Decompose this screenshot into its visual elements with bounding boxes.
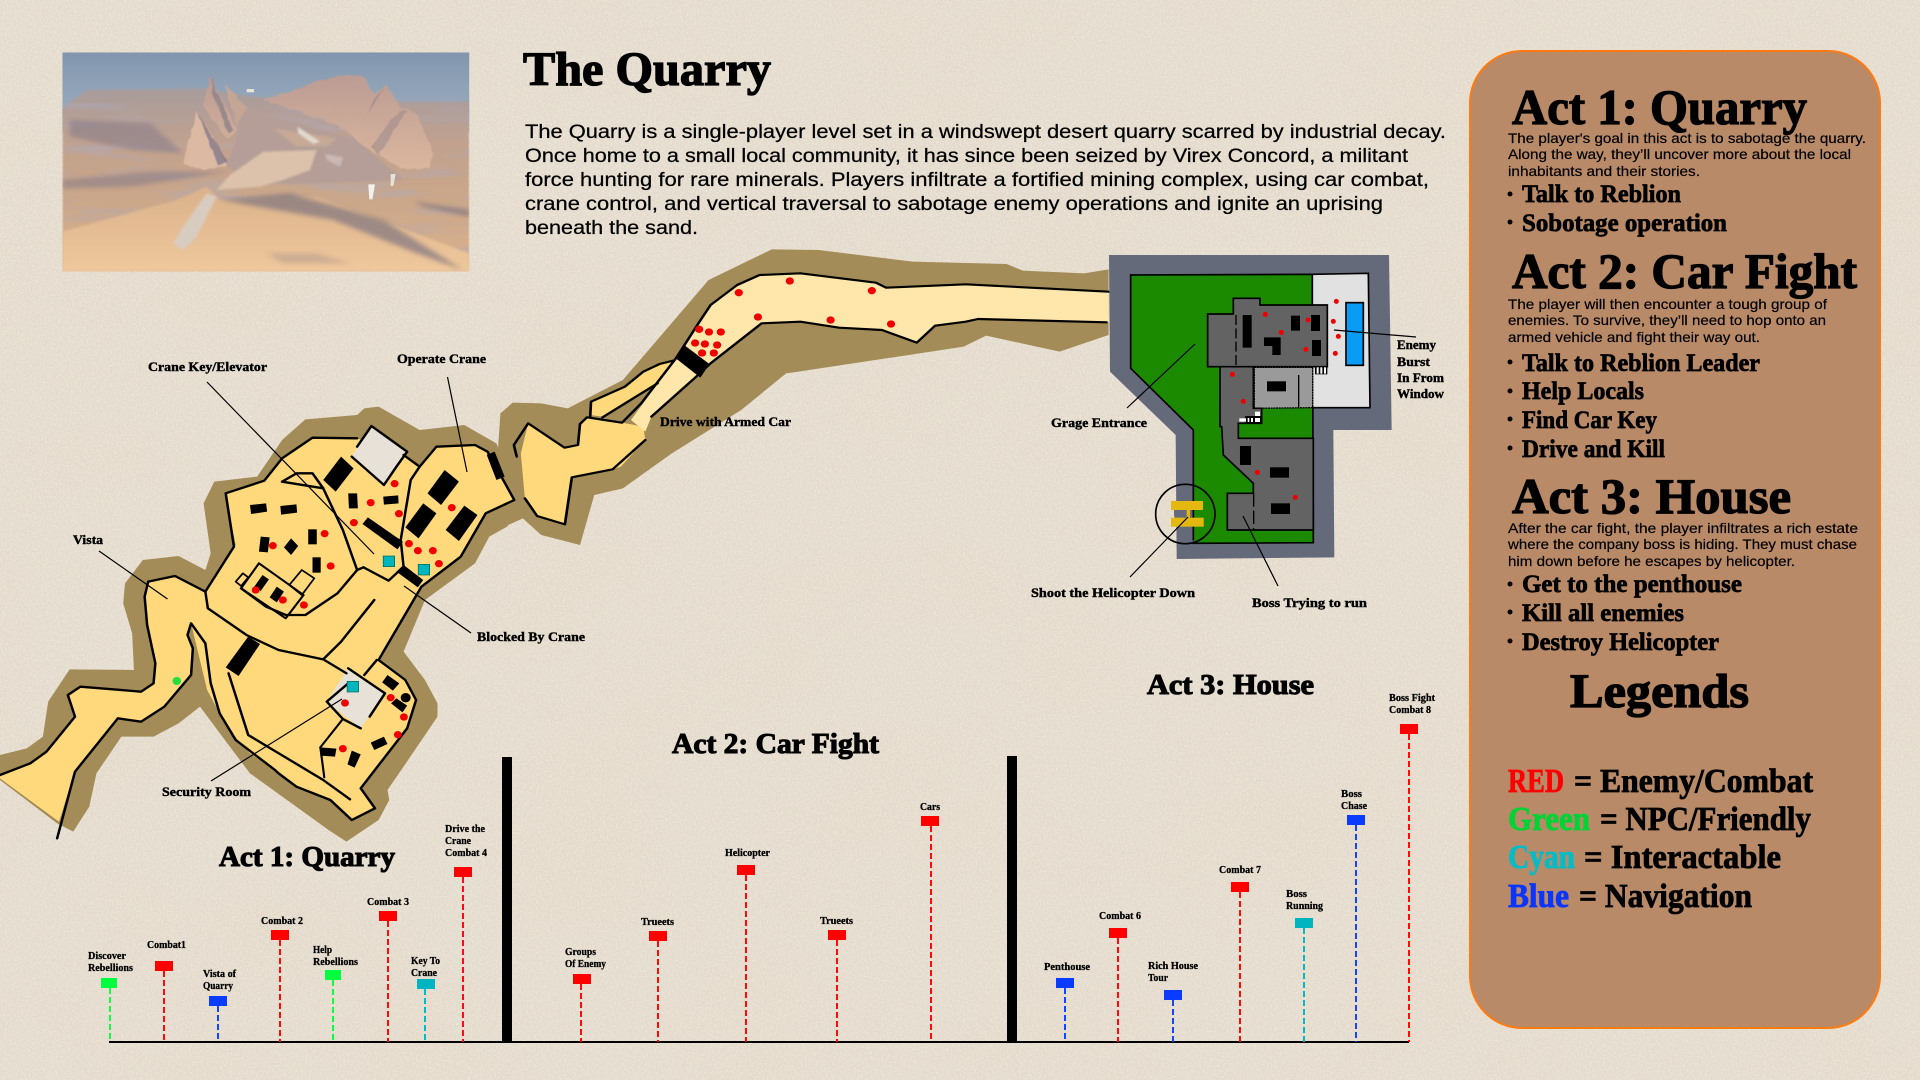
milestone: Key To Crane bbox=[411, 955, 440, 1042]
act 2 summary: Help Locals bbox=[1522, 378, 1644, 405]
legend rows: Green bbox=[1508, 801, 1590, 838]
legend heading: Legends bbox=[1570, 665, 1749, 718]
milestone: Combat 7 bbox=[1219, 864, 1261, 1042]
intro paragraph: crane control, and vertical traversal to sabotage enemy operations and ignite an uprising bbox=[525, 193, 1383, 215]
milestone: Drive the Crane: Crane bbox=[445, 835, 471, 847]
panel: act summaries and legend bbox=[1470, 51, 1880, 1028]
milestone: Discover Rebellions: Discover bbox=[88, 950, 126, 962]
milestone: Combat 7: Combat 7 bbox=[1219, 864, 1261, 876]
milestone: Combat 6: Combat 6 bbox=[1099, 910, 1141, 922]
milestone: Cars bbox=[920, 801, 941, 1042]
act 2 summary: Find Car Key bbox=[1522, 407, 1657, 434]
milestone: Trueets: Trueets bbox=[641, 916, 675, 928]
milestone: Key To Crane: Key To bbox=[411, 955, 440, 967]
friendly marker bbox=[172, 677, 181, 685]
act 1 summary: Along the way, they’ll uncover more about the local bbox=[1508, 146, 1851, 162]
milestone: Combat1: Combat1 bbox=[147, 939, 186, 951]
milestone: Drive the Crane bbox=[445, 823, 487, 1042]
milestone: Combat 2: Combat 2 bbox=[261, 915, 303, 927]
helipad bbox=[1156, 484, 1215, 544]
road enemy markers bbox=[691, 277, 895, 357]
timeline axis and act dividers bbox=[109, 756, 1409, 1043]
estate enemy markers bbox=[1230, 299, 1341, 500]
milestone: Combat1 bbox=[147, 939, 186, 1042]
milestone: Boss Running bbox=[1286, 888, 1323, 1042]
act 3 summary bbox=[1507, 468, 1858, 656]
act 2 summary: Drive and Kill bbox=[1522, 436, 1665, 463]
intro paragraph: beneath the sand. bbox=[525, 217, 698, 239]
map callout labels bbox=[73, 337, 1445, 799]
stairs bbox=[1239, 367, 1327, 423]
milestone: Cars: Cars bbox=[920, 801, 941, 813]
legend rows: = Navigation bbox=[1579, 878, 1752, 915]
buildings: black blocks bbox=[226, 452, 505, 768]
map leader lines bbox=[99, 330, 1416, 781]
milestone: Groups Of Enemy bbox=[565, 946, 606, 1042]
legend rows: = Enemy/Combat bbox=[1574, 763, 1814, 800]
milestone: Boss Chase: Boss bbox=[1341, 788, 1363, 800]
milestone: Combat 2 bbox=[261, 915, 303, 1042]
pacing timeline chart bbox=[88, 692, 1435, 1043]
map callout labels: Drive with Armed Car bbox=[660, 414, 791, 429]
milestone: Trueets second: Trueets bbox=[820, 915, 854, 927]
map callout labels: Security Room bbox=[162, 784, 251, 799]
act 1 summary: Talk to Reblion bbox=[1522, 181, 1681, 208]
act 3 summary: Destroy Helicopter bbox=[1522, 629, 1719, 656]
act 3 summary: Act 3: House bbox=[1512, 468, 1791, 524]
title: The Quarry bbox=[523, 43, 771, 96]
milestone: Trueets bbox=[641, 916, 675, 1042]
milestone: Rich House Tour: Tour bbox=[1148, 972, 1168, 984]
legend rows: Cyan bbox=[1508, 839, 1575, 876]
legend rows: Blue bbox=[1508, 878, 1569, 915]
enemy markers bbox=[252, 480, 456, 752]
map: road to the estate (Act 2) bbox=[514, 273, 1109, 524]
milestone: Boss Chase: Chase bbox=[1341, 800, 1367, 812]
milestone: Groups Of Enemy: Of Enemy bbox=[565, 958, 606, 970]
act 1 summary: Sobotage operation bbox=[1522, 210, 1727, 237]
milestone: Penthouse bbox=[1044, 961, 1090, 1042]
map: estate floor plan (Act 3) bbox=[1109, 255, 1392, 559]
milestone: Boss Chase bbox=[1341, 788, 1367, 1042]
map: road section terrain band bbox=[496, 249, 1109, 545]
milestone: Drive the Crane: Drive the bbox=[445, 823, 485, 835]
legend rows: = NPC/Friendly bbox=[1600, 801, 1811, 838]
screenshot of the quarry landscape bbox=[62, 52, 469, 272]
milestone: Combat 3: Combat 3 bbox=[367, 896, 409, 908]
interactable markers bbox=[347, 556, 430, 692]
furniture blocks bbox=[1240, 315, 1321, 514]
timeline heading: act 1: Act 1: Quarry bbox=[219, 841, 395, 873]
milestone: Rich House Tour: Rich House bbox=[1148, 960, 1198, 972]
intro paragraph: force hunting for rare minerals. Players infiltrate a fortified mining complex, using car combat, bbox=[525, 169, 1429, 191]
milestone: Groups Of Enemy: Groups bbox=[565, 946, 597, 958]
act 3 summary: Kill all enemies bbox=[1522, 600, 1684, 627]
act 2 summary: Act 2: Car Fight bbox=[1512, 243, 1857, 299]
milestone: Boss Running: Boss bbox=[1286, 888, 1308, 900]
milestone: Key To Crane: Crane bbox=[411, 967, 437, 979]
milestone: Drive the Crane: Combat 4 bbox=[445, 847, 487, 859]
intro paragraph bbox=[525, 121, 1446, 239]
milestone: Combat 3 bbox=[367, 896, 409, 1042]
act 2 summary: Talk to Reblion Leader bbox=[1522, 350, 1760, 377]
act 2 summary: enemies. To survive, they’ll need to hop onto an bbox=[1508, 312, 1826, 328]
milestone: Help Rebellions: Help bbox=[313, 944, 332, 956]
act 1 summary: The player's goal in this act is to sabotage the quarry. bbox=[1508, 130, 1866, 146]
milestone: Discover Rebellions bbox=[88, 950, 134, 1042]
milestone: Vista of Quarry bbox=[203, 968, 236, 1042]
act 3 summary: Get to the penthouse bbox=[1522, 571, 1742, 598]
map callout labels: Vista bbox=[73, 532, 104, 547]
map callout labels: Blocked By Crane bbox=[477, 629, 585, 644]
map callout labels: Crane Key/Elevator bbox=[148, 359, 267, 374]
act 1 summary: Act 1: Quarry bbox=[1512, 79, 1807, 135]
milestone: Boss Fight Combat 8: Combat 8 bbox=[1389, 704, 1431, 716]
milestone: Discover Rebellions: Rebellions bbox=[88, 962, 134, 974]
act 1 summary bbox=[1508, 79, 1866, 237]
milestone: Boss Fight Combat 8 bbox=[1389, 692, 1435, 1042]
map callout labels: Operate Crane bbox=[397, 351, 486, 366]
milestone: Combat 6 bbox=[1099, 910, 1141, 1042]
act 3 summary: where the company boss is hiding. They must chase bbox=[1507, 536, 1857, 552]
intro paragraph: Once home to a small local community, it has since been seized by Virex Concord, a militant bbox=[525, 145, 1409, 167]
milestone: Help Rebellions: Rebellions bbox=[313, 956, 359, 968]
milestone: Boss Running: Running bbox=[1286, 900, 1323, 912]
milestone: Boss Fight Combat 8: Boss Fight bbox=[1389, 692, 1435, 704]
act 1 summary: inhabitants and their stories. bbox=[1508, 163, 1700, 179]
intro paragraph: The Quarry is a single-player level set in a windswept desert quarry scarred by industrial decay. bbox=[525, 121, 1446, 143]
milestone: Rich House Tour bbox=[1148, 960, 1198, 1042]
act 2 summary bbox=[1508, 243, 1857, 463]
map: quarry level (Act 1) bbox=[0, 407, 521, 842]
map callout labels: Burst bbox=[1397, 354, 1431, 369]
act 2 summary: armed vehicle and fight their way out. bbox=[1508, 329, 1760, 345]
milestone: Penthouse: Penthouse bbox=[1044, 961, 1090, 973]
act 3 summary: After the car fight, the player infiltrates a rich estate bbox=[1508, 520, 1858, 536]
timeline heading: act 2: Act 2: Car Fight bbox=[672, 728, 879, 760]
milestone: Vista of Quarry: Quarry bbox=[203, 980, 233, 992]
act 3 summary: him down before he escapes by helicopter. bbox=[1508, 553, 1795, 569]
map callout labels: In From bbox=[1397, 370, 1444, 385]
map callout labels: Grage Entrance bbox=[1051, 415, 1147, 430]
milestone: Helicopter bbox=[725, 847, 770, 1042]
legend rows: = Interactable bbox=[1584, 839, 1781, 876]
legend rows: RED bbox=[1508, 763, 1564, 800]
act 2 summary: The player will then encounter a tough group of bbox=[1508, 296, 1827, 312]
gate block bbox=[676, 345, 709, 378]
legend rows bbox=[1508, 763, 1814, 915]
milestone: Vista of Quarry: Vista of bbox=[203, 968, 236, 980]
map callout labels: Boss Trying to run bbox=[1252, 595, 1368, 610]
map callout labels: Shoot the Helicopter Down bbox=[1031, 585, 1196, 600]
timeline heading: act 3: Act 3: House bbox=[1147, 669, 1314, 701]
milestone: Help Rebellions bbox=[313, 944, 359, 1042]
map callout labels: Enemy bbox=[1397, 337, 1436, 352]
map callout labels: Window bbox=[1397, 386, 1445, 401]
milestone: Helicopter: Helicopter bbox=[725, 847, 770, 859]
milestone: Trueets second bbox=[820, 915, 854, 1042]
